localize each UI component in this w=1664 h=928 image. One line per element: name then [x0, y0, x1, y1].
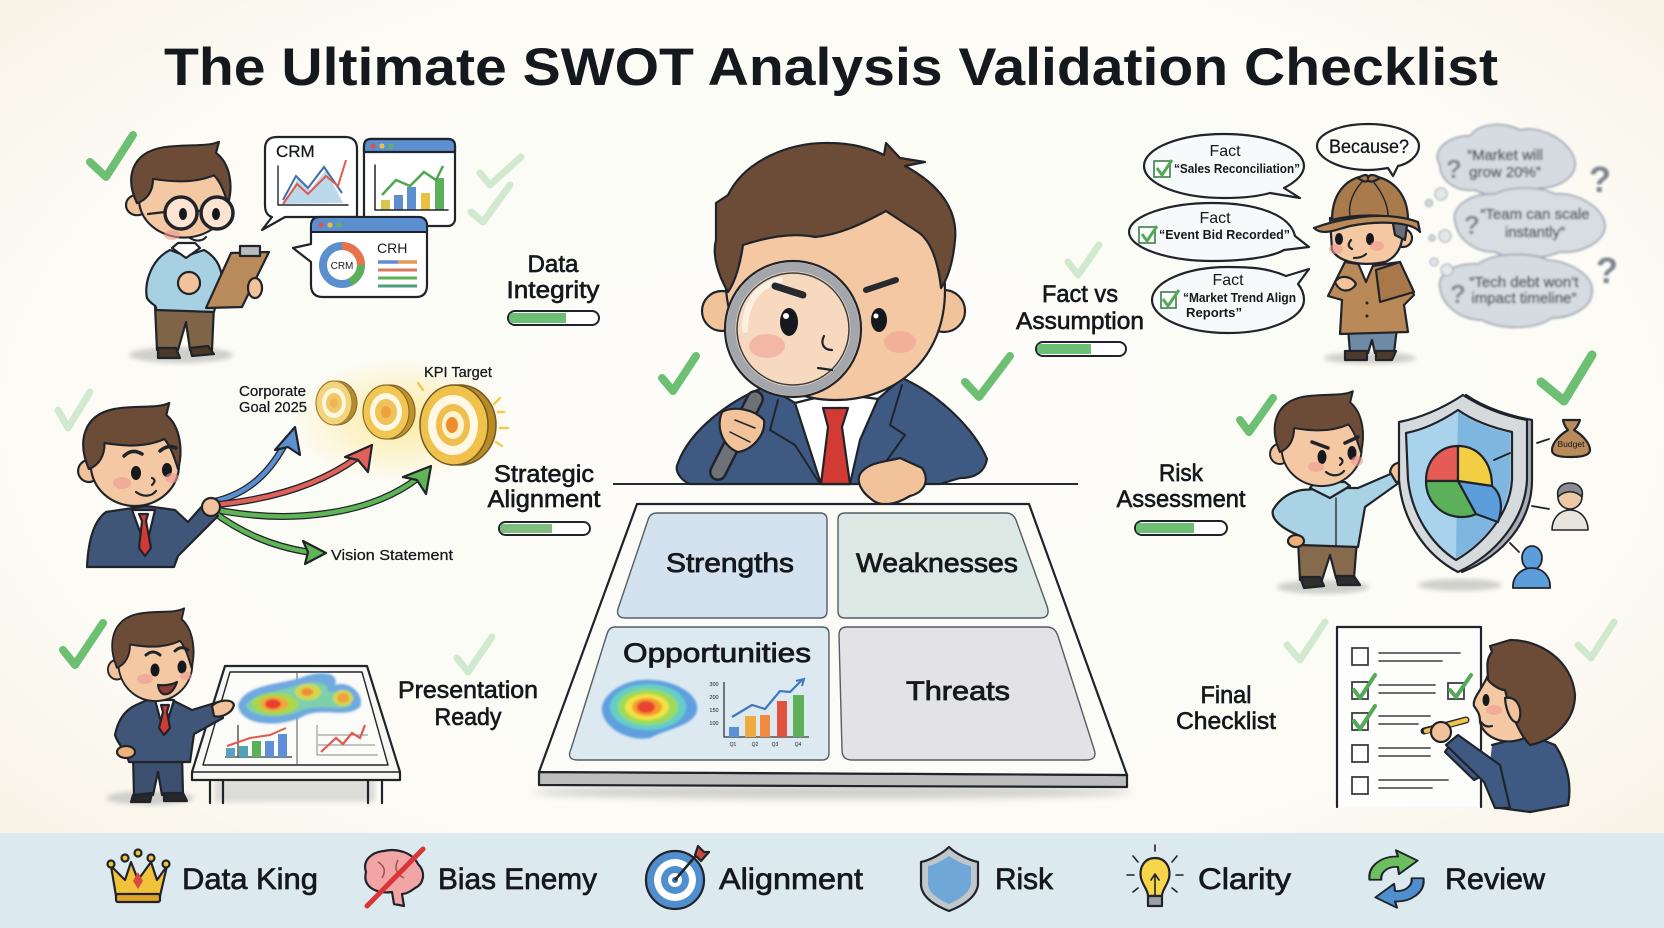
money bag: budget: Budget [1558, 439, 1585, 449]
progress bar [1036, 342, 1126, 356]
cloud 1 [1437, 125, 1575, 196]
target labels: Vision Statement [331, 547, 454, 564]
progress bar [499, 522, 590, 535]
label: presentation ready: Ready [434, 704, 502, 731]
cloud 1: grow 20%” [1469, 164, 1541, 181]
title: The Ultimate SWOT Analysis Validation Checklist [164, 38, 1498, 97]
cloud 3: impact timeline” [1471, 290, 1577, 307]
bar chart: Q1 [730, 742, 737, 748]
checklist paper [1337, 627, 1481, 807]
target labels: KPI Target [424, 364, 493, 381]
vignette: final checklist [1287, 622, 1614, 812]
pencil [1424, 720, 1466, 731]
label: fact vs assumption: Fact vs [1042, 281, 1118, 308]
progress bar [508, 311, 599, 325]
check mark [90, 135, 133, 177]
person: doctor [1552, 483, 1588, 530]
glasses [148, 197, 233, 241]
fact bubble 1 [1144, 134, 1304, 198]
threats cell [839, 627, 1095, 760]
item: bias enemy: Bias Enemy [438, 863, 597, 896]
check mark [63, 623, 103, 665]
bar chart: Q2 [752, 742, 759, 748]
progress bar [1135, 521, 1227, 535]
vignette: presentation ready [63, 608, 492, 805]
CRM line chart bubble: CRM [276, 142, 315, 161]
label: fact vs assumption: Assumption [1016, 308, 1144, 335]
detective [1314, 175, 1420, 364]
target coins [316, 381, 508, 465]
fact bubble 3: Fact [1212, 272, 1244, 289]
shield [1399, 395, 1532, 591]
cloud 1: “Market will [1467, 147, 1543, 164]
label: fact vs assumption [1016, 245, 1144, 356]
faint check [457, 637, 492, 672]
faint checks [471, 157, 521, 222]
icon: shield [921, 847, 978, 911]
character [78, 403, 220, 567]
clipboard [178, 246, 269, 308]
label: data integrity: Data [528, 251, 579, 278]
pie chart [1426, 446, 1501, 522]
CRM donut window [293, 217, 427, 297]
fact bubble 1: Fact [1209, 143, 1241, 160]
central character with magnifying glass [613, 143, 1078, 504]
label: final checklist: Final [1200, 682, 1252, 709]
CRM donut window: CRM [331, 261, 353, 272]
assumption clouds: ? [1589, 159, 1611, 200]
shirt and tie [770, 385, 905, 484]
label: final checklist: Checklist [1176, 708, 1276, 735]
risk connectors [1494, 439, 1549, 552]
target labels: Corporate [239, 383, 306, 400]
bar chart: 200 [709, 695, 719, 701]
target labels [239, 364, 493, 564]
fact bubble 3: Reports” [1186, 305, 1242, 320]
label: strategic alignment [488, 461, 601, 535]
fact bubble 3: “Market Trend Align [1183, 290, 1296, 305]
jacket [677, 378, 987, 484]
label: risk assessment: Assessment [1116, 486, 1246, 513]
bar chart: 100 [709, 721, 719, 727]
icon: light bulb [1127, 845, 1183, 906]
heatmap [238, 673, 361, 724]
arrows [212, 427, 431, 564]
desk line [613, 483, 1078, 485]
item: clarity [1127, 845, 1291, 906]
CRM line chart bubble [262, 137, 357, 230]
cloud 3 [1440, 254, 1592, 327]
presentation table [192, 666, 400, 803]
character [106, 608, 234, 805]
faint check [1068, 245, 1099, 275]
fact bubble 2: Fact [1199, 210, 1231, 227]
fact bubble 2 [1129, 203, 1309, 261]
opportunities cell [570, 627, 829, 760]
strengths cell: Strengths [666, 548, 794, 578]
label: strategic alignment: Strategic [494, 461, 594, 488]
bar chart: 300 [709, 682, 719, 688]
fact bubble 1: “Sales Reconciliation” [1174, 161, 1300, 176]
bar chart: 150 [709, 708, 719, 714]
label: data integrity: Integrity [506, 277, 600, 304]
weaknesses cell: Weaknesses [856, 548, 1018, 578]
cloud 2 [1454, 188, 1605, 258]
assumption clouds [1426, 125, 1618, 327]
item: review [1369, 850, 1545, 908]
vignette: data integrity character with CRM screens [90, 135, 521, 363]
opportunities cell: Opportunities [623, 638, 811, 668]
vignette: detective fact vs assumption [1129, 124, 1618, 364]
label: final checklist [1176, 682, 1276, 735]
fact bubble 3 [1152, 267, 1309, 333]
vignette: strategic alignment [58, 358, 510, 567]
bar chart [709, 679, 809, 748]
item: risk: Risk [995, 863, 1054, 896]
item: data king [108, 850, 318, 902]
bar chart window [364, 139, 455, 226]
check marks [1240, 355, 1592, 432]
icon: crossed brain [365, 849, 423, 906]
target labels: Goal 2025 [239, 399, 307, 416]
label: presentation ready [398, 677, 538, 731]
faint checks [1287, 622, 1614, 660]
check marks [662, 356, 1010, 397]
cloud 1: ? [1446, 154, 1462, 184]
item: alignment: Alignment [719, 863, 864, 896]
label: strategic alignment: Alignment [488, 486, 601, 513]
magnifying glass [718, 261, 861, 472]
cloud 2: instantly” [1505, 224, 1565, 241]
bar chart: Q4 [795, 742, 802, 748]
money bag: budget [1552, 420, 1590, 457]
icon: crown [108, 850, 170, 902]
item: data king: Data King [182, 863, 318, 896]
cloud 3: “Tech debt won’t [1469, 274, 1579, 291]
item: alignment [646, 846, 864, 909]
icon: cycle arrows [1369, 850, 1424, 908]
because bubble [1317, 124, 1419, 176]
item: review: Review [1445, 863, 1545, 896]
item: bias enemy [365, 849, 597, 906]
CRM donut window: CRH [377, 240, 407, 256]
character from side [1424, 640, 1575, 812]
bottom legend band [0, 833, 1664, 928]
SWOT board [532, 504, 1132, 799]
label: presentation ready: Presentation [398, 677, 538, 704]
head [702, 143, 965, 400]
heatmap [602, 680, 697, 739]
label: data integrity [506, 251, 600, 325]
threats cell: Threats [906, 676, 1010, 706]
item: risk [921, 847, 1054, 911]
resting hand [859, 458, 926, 504]
cloud 3: ? [1450, 279, 1466, 309]
cloud 2: ? [1464, 210, 1480, 240]
because bubble: Because? [1329, 137, 1409, 158]
vignette: risk assessment [1240, 355, 1592, 594]
fact bubble 2: “Event Bid Recorded” [1159, 227, 1290, 242]
strengths cell [618, 513, 827, 618]
assumption clouds: ? [1596, 250, 1618, 291]
icon: target [646, 846, 709, 909]
table charts [225, 725, 292, 757]
label: risk assessment: Risk [1159, 460, 1204, 487]
bar chart: Q3 [772, 742, 779, 748]
cloud 2: “Team can scale [1480, 206, 1590, 223]
faint check [58, 392, 90, 428]
label: risk assessment [1116, 460, 1246, 535]
person: blue user [1513, 546, 1550, 588]
item: clarity: Clarity [1198, 863, 1291, 896]
weaknesses cell [838, 513, 1048, 618]
character [1270, 391, 1406, 594]
